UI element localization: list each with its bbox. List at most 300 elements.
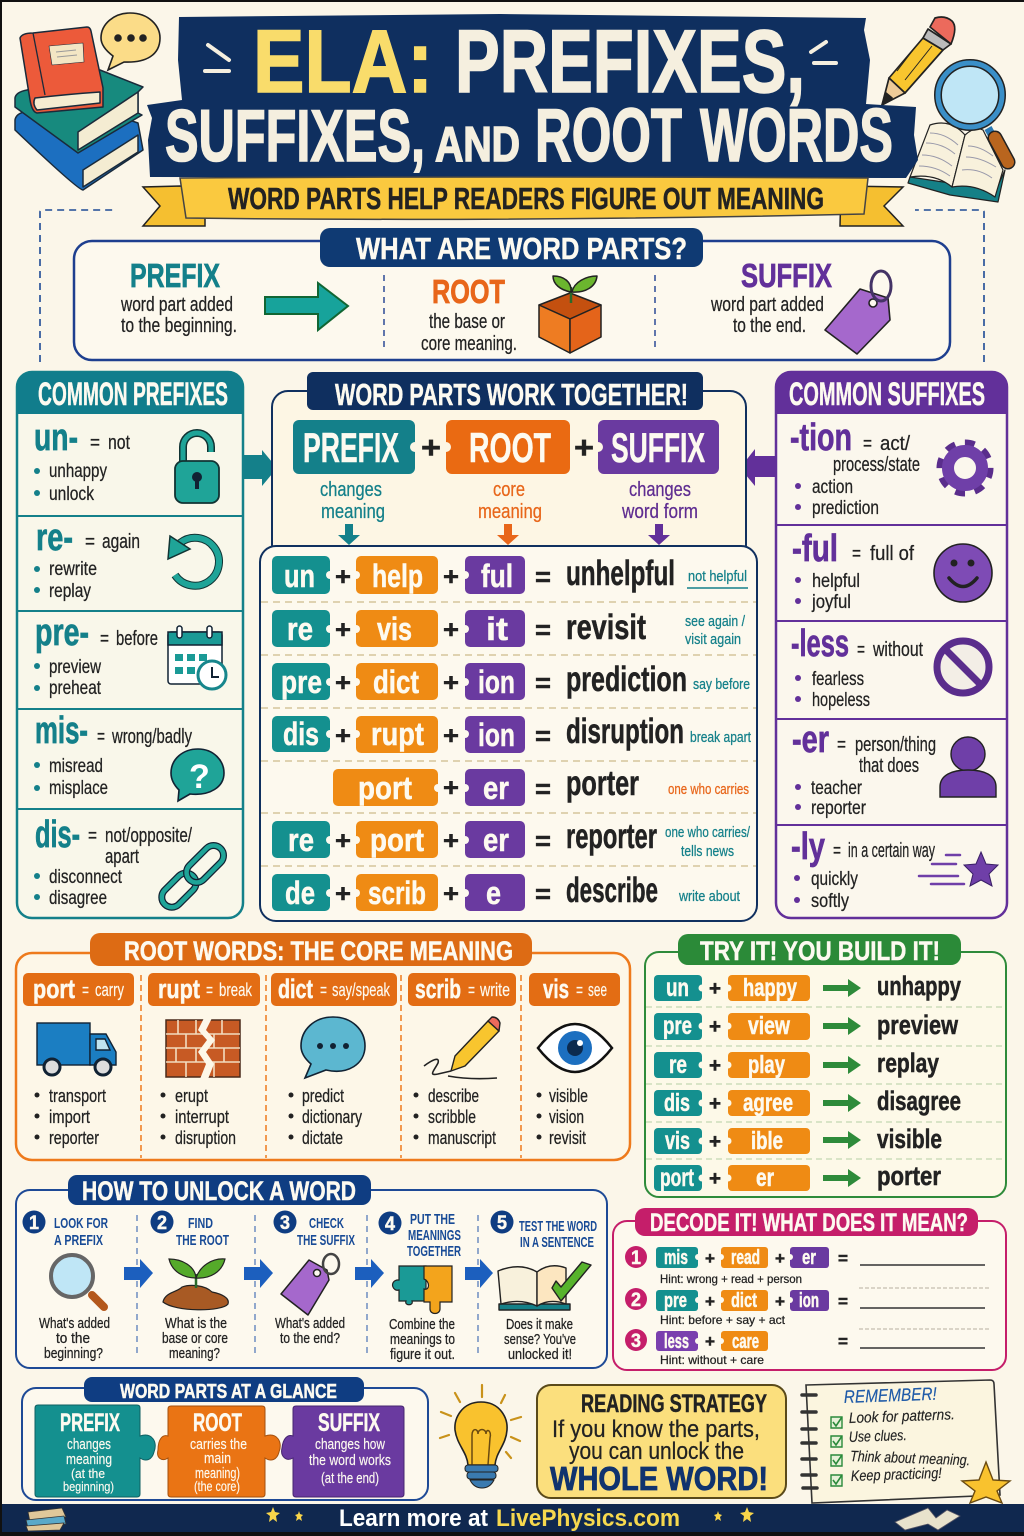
step 2: base or core [162,1331,228,1347]
callout: reading strategy [537,1385,786,1498]
heading: what are word parts: WHAT ARE WORD PARTS? [356,231,687,266]
icon: calendar with clock [168,626,226,689]
icon: tag [281,1254,339,1315]
suffix definition: to the end. [733,315,806,337]
decode row 1: + [775,1249,785,1268]
icon: gold star [962,1462,1010,1503]
suffix: er: that does [859,755,919,777]
notepad: remember: Look for patterns. [849,1406,955,1427]
equation: unhelpful: = [535,562,551,592]
heading: root words: ROOT WORDS: THE CORE MEANING [124,936,513,966]
step 1 [22,1210,110,1362]
equation: revisit: visit again [685,631,741,648]
build row: replay: replay [877,1048,939,1078]
formula: prefix: PREFIX [303,424,399,471]
arrow: suffixes to center [740,449,775,486]
step 1: beginning? [44,1346,103,1362]
decode row 3: + [705,1332,715,1351]
panel: common prefixes [17,372,243,918]
step 4: MEANINGS [408,1227,461,1244]
footer text [339,1505,680,1532]
equation: porter [333,764,749,806]
equation: reporter: = [535,826,551,856]
step 2 [150,1210,229,1362]
suffix: ly: = [833,840,841,862]
suffix: ly: in a certain way [848,840,935,862]
icon: pencil writing [424,1017,500,1079]
root card: vis: vis [543,974,569,1004]
build row: visible: + [709,1131,721,1153]
build row: porter: er [756,1164,774,1192]
suffix: ful: helpful [812,571,860,592]
panel: word parts at a glance [22,1377,428,1500]
prefix: un: not [108,432,130,454]
suffix: ful: -ful [792,528,838,570]
heading: word parts work together: WORD PARTS WORK TOGETHER! [335,377,688,412]
equation: prediction: + [443,669,459,697]
suffix: tion [790,417,920,519]
decode row 1: = [838,1249,848,1268]
root card: port: import [49,1107,90,1127]
arrow [465,1259,493,1288]
root card: scrib: manuscript [428,1128,496,1148]
root card: dict [271,973,397,1148]
equation: unhelpful: ful [481,558,513,594]
build row: preview: preview [877,1010,959,1040]
equation: disruption: + [335,722,351,750]
caption: changes word form: changes [629,479,691,501]
equation: reporter: + [443,827,459,855]
decode row 1: read [731,1247,760,1269]
root definition: core meaning. [421,333,517,355]
title banner [147,11,918,178]
step 5: unlocked it! [508,1347,572,1363]
equation: unhelpful: not helpful [688,568,747,585]
panel: try it you build it [645,934,1006,1197]
prefix: dis: not/opposite/ [105,825,192,847]
decode row 1 [625,1246,985,1286]
prefix: dis: dis- [35,814,80,856]
build row: unhappy: unhappy [877,971,961,1001]
step 3: CHECK [309,1215,344,1232]
build row: replay: play [748,1051,785,1079]
caption: changes word form: word form [621,501,698,523]
root card: scrib: = [468,980,475,1000]
prefix: pre: = [100,628,109,650]
root card: rupt: rupt [158,974,200,1004]
notepad: remember: Think about meaning. [850,1448,970,1469]
footer stars [266,1507,754,1522]
icon: chain links [158,841,228,911]
footer text: LivePhysics.com [496,1505,680,1532]
root card: vis: = [576,980,583,1000]
equation: describe: scrib [368,875,426,911]
puzzle piece: prefix: (at the [71,1466,105,1481]
equation: prediction [272,660,750,700]
suffix: ly: quickly [811,869,858,890]
decode row 2: + [705,1292,715,1311]
panel: what are word parts [74,228,950,360]
arrow [124,1259,153,1288]
prefix: re [34,517,140,602]
step 4: 4 [385,1214,395,1235]
build row: porter: porter [877,1161,941,1191]
build row: porter: + [709,1168,721,1190]
suffix: er: reporter [811,798,867,819]
puzzle piece: root: (the core) [194,1478,240,1494]
root card: scrib [408,973,516,1148]
build row: replay: re [669,1051,687,1079]
footer bar [0,1504,1024,1536]
icon: open padlock [175,433,219,503]
decode row 2: dict [731,1290,757,1312]
build row: unhappy: happy [743,974,797,1002]
root card: rupt: disruption [175,1128,236,1148]
decode row 3 [625,1329,985,1367]
equation: unhelpful: help [372,558,423,594]
decode row 3: = [838,1332,848,1351]
step 4: figure it out. [390,1347,455,1363]
equation: describe: describe [566,871,658,910]
decode row 1: + [705,1249,715,1268]
prefix: un: un- [34,417,78,459]
step 3: What's added [275,1316,345,1332]
icon: purple tag [825,271,891,354]
build row: visible [654,1124,942,1155]
step 3: to the end? [280,1331,340,1347]
panel: common suffixes [776,372,1007,918]
suffix: less: fearless [812,669,864,690]
equation: unhelpful: un [284,558,315,594]
suffix: ly: -ly [791,826,825,868]
caption: core meaning: meaning [478,501,542,523]
formula: prefix [293,420,420,474]
root card: scrib: write [479,980,510,1000]
puzzle piece: root: main [204,1450,231,1467]
equation: porter: porter [566,764,639,803]
equation: prediction: + [335,669,351,697]
arrow [244,1259,273,1288]
build row: preview: view [748,1012,790,1040]
icon: eye [538,1024,612,1072]
prefix: dis [34,814,192,909]
suffix: tion: action [812,477,853,498]
equation: reporter: re [288,822,314,858]
equation: porter: er [483,770,509,806]
prefix: mis: misplace [49,778,108,799]
puzzle piece: root: carries the [190,1436,247,1453]
callout: reading strategy: READING STRATEGY [581,1390,767,1418]
step 4 [378,1211,461,1363]
equation: prediction: ion [478,664,515,700]
suffix: less: without [872,639,923,661]
suffix: er: person/thing [855,734,936,756]
root card: dict: predict [302,1086,344,1106]
prefix: mis: wrong/badly [111,726,192,748]
icon: person [940,737,996,797]
puzzle piece: suffix: the word works [309,1452,391,1469]
decode row 2: ion [799,1290,819,1312]
puzzle piece: prefix: beginning) [63,1479,114,1494]
step 5: 5 [497,1213,507,1234]
equation: porter: port [358,770,412,806]
title line 1: ELA: [253,11,433,111]
equation: prediction: say before [693,676,750,693]
step 3 [274,1210,355,1347]
prefix: dis: disconnect [49,867,123,888]
prefix: un [34,417,130,505]
suffix definition: SUFFIX [741,257,832,294]
step 5: sense? You've [504,1332,576,1348]
decode row 3: care [732,1331,759,1353]
footer text: Learn more at [339,1505,488,1532]
formula: root: ROOT [469,424,551,471]
title line 2: WORDS [700,93,893,177]
equation: disruption: break apart [690,729,752,746]
prefix: re: rewrite [49,559,97,580]
icon: speech bubble [301,1017,365,1078]
step 2: FIND [188,1215,213,1232]
decode row 1: er [802,1247,816,1269]
suffix definition [710,257,832,337]
step 2: 2 [157,1213,167,1234]
decode row 2: = [838,1292,848,1311]
decode row 2 [625,1288,985,1327]
equation: prediction: = [535,668,551,698]
root card: scrib: scribble [428,1107,476,1127]
build row: porter: port [660,1164,694,1192]
root card: rupt [148,973,260,1148]
icon: stack of books [15,27,143,190]
title line 2: AND [435,118,520,172]
equation: describe: + [335,880,351,908]
prefix definition: to the beginning. [121,315,237,337]
equation: revisit: it [486,611,508,647]
equation: prediction: prediction [566,660,687,699]
suffix: tion: prediction [812,498,879,519]
formula: suffix [593,420,719,474]
build row: visible: visible [877,1124,942,1154]
icon: cracked brick wall [166,1018,240,1079]
puzzle piece: prefix: changes [67,1436,111,1453]
root card: scrib: describe [428,1086,479,1106]
title line 1: PREFIXES, [455,11,805,111]
prefix: mis [34,710,192,799]
puzzle piece: root [158,1406,280,1497]
formula: root [441,420,570,474]
root definition: ROOT [432,273,505,310]
root card: rupt: erupt [175,1086,208,1106]
heading: word parts at a glance [84,1377,364,1403]
panel: word parts work together formula: + [574,430,594,465]
suffix: ly [791,826,935,912]
prefix: pre: before [116,628,158,650]
equation: reporter: er [483,822,509,858]
root card: port: reporter [49,1128,99,1148]
equation: describe: e [486,875,501,911]
build row: disagree: + [709,1093,721,1115]
prefix: re: again [102,531,140,553]
prefix: re: re- [36,517,73,559]
root card: port [23,973,134,1148]
icon: books [26,1508,66,1531]
root card: rupt: break [219,980,253,1000]
puzzle piece: prefix [35,1405,155,1497]
prefix: pre: preheat [49,678,102,699]
suffix: er: = [837,734,846,756]
equation: revisit: see again / [685,613,746,630]
icon: question speech bubble: ? [189,758,210,796]
equation: reporter: tells news [681,843,734,860]
equation: describe: = [535,879,551,909]
suffix: less: hopeless [812,690,870,711]
root card: vis [529,973,620,1148]
step 2: THE ROOT [176,1232,229,1249]
build row: preview: + [709,1016,721,1038]
equation: reporter: reporter [566,817,657,856]
step 4: Combine the [389,1317,455,1333]
root card: scrib: scrib [415,974,461,1004]
decode row 3: 3 [631,1331,641,1352]
decode row 1: 1 [631,1248,641,1269]
root card: dict: dict [278,974,313,1004]
icon: teal arrow [265,283,348,330]
equation: revisit: vis [377,611,412,647]
equation: prediction: pre [281,664,322,700]
step 2: meaning? [169,1346,220,1362]
build row: disagree: disagree [877,1086,961,1116]
build row: disagree: agree [743,1089,793,1117]
decode row 2: 2 [631,1290,641,1311]
caption: changes meaning [320,479,385,545]
equation: prediction: dict [373,664,419,700]
prefix: pre: preview [49,657,101,678]
step 1: A PREFIX [54,1232,103,1249]
root card: vis: vision [549,1107,584,1127]
prefix: dis: = [88,825,97,847]
notepad: remember [802,1380,1010,1503]
title line 1 [253,11,805,111]
build row: preview: pre [663,1012,692,1040]
panel: decode it [613,1208,1006,1370]
prefix: un: unhappy [49,461,107,482]
step 2: What is the [165,1316,227,1332]
step 5 [490,1210,597,1363]
arrow: prefixes to center [243,450,277,486]
icon: seedling in soil [163,1259,228,1310]
step 1: 1 [29,1213,39,1234]
icon: gear [941,444,989,492]
suffix: ly: softly [811,891,849,912]
build row: unhappy: + [709,978,721,1000]
icon: undo arrow [168,536,219,586]
root definition: the base or [429,311,505,333]
icon: truck [37,1023,116,1075]
icon: pencil [882,17,955,105]
root card: port: = [82,980,89,1000]
caption: core meaning: core [493,479,525,501]
suffix: tion: act/ [880,433,910,455]
root definition [421,273,517,355]
caption: changes word form [621,479,698,545]
root card: dict: dictate [302,1128,343,1148]
equation: unhelpful [272,554,748,594]
prefix: mis: misread [49,756,103,777]
suffix: less: -less [791,623,849,665]
notepad: remember: Keep practicing! [851,1465,943,1485]
icon: puzzle pieces [393,1266,452,1314]
build row: porter [654,1161,941,1192]
puzzle piece: suffix: (at the end) [321,1470,379,1487]
root card: vis: visible [549,1086,588,1106]
suffix: tion: process/state [833,454,920,476]
suffix: er: teacher [811,778,863,799]
prefix definition [120,257,237,337]
callout: reading strategy: you can unlock the [569,1438,744,1465]
suffix: ful: = [852,543,861,565]
step 4: PUT THE [410,1211,455,1228]
ribbon subtitle: WORD PARTS HELP READERS FIGURE OUT MEANING [228,181,824,216]
decode row 2: + [775,1292,785,1311]
build row: visible: ible [751,1127,783,1155]
suffix: ful [792,528,914,613]
decode row 1: Hint: wrong + read + person [660,1272,802,1286]
prefix: re: replay [49,581,91,602]
prefix: pre: pre- [35,612,89,654]
panel: root words [16,933,630,1160]
puzzle piece: prefix: PREFIX [60,1409,120,1437]
equation: revisit: = [535,615,551,645]
step 1: LOOK FOR [54,1215,108,1232]
icon: light bulb [440,1385,521,1488]
prefix: dis: apart [105,846,139,868]
panel: word parts work together formula: + [421,430,441,465]
root card: vis: see [588,980,607,1000]
equation: revisit: + [335,616,351,644]
title line 2: ROOT [535,93,682,177]
heading: word parts at a glance: WORD PARTS AT A GLANCE [120,1381,337,1403]
heading: try it: TRY IT! YOU BUILD IT! [700,936,940,966]
build row: disagree [654,1086,961,1117]
arrow [355,1259,384,1288]
step 5: TEST THE WORD [519,1218,597,1235]
icon: smiley face [934,544,992,602]
root card: port: transport [49,1086,106,1106]
puzzle piece: suffix: SUFFIX [318,1409,380,1437]
equation: reporter [272,817,751,860]
equation: describe: + [443,880,459,908]
decode row 2: Hint: before + say + act [660,1313,786,1327]
prefix definition: PREFIX [130,257,220,294]
prefix: mis: mis- [35,710,88,752]
root card: rupt: interrupt [175,1107,229,1127]
equation: describe [272,871,741,911]
equation: reporter: port [370,822,424,858]
heading: common prefixes [17,372,243,414]
formula: suffix: SUFFIX [611,424,705,471]
prefix: re: = [85,531,95,553]
decode row 1: mis [664,1247,688,1269]
notepad: remember: REMEMBER! [843,1384,937,1407]
puzzle piece: root: meaning) [195,1465,240,1482]
notepad: remember: Use clues. [849,1427,907,1446]
icon: open book with check mark [498,1262,591,1310]
suffix: less [791,623,923,711]
prefix: un: = [90,432,100,454]
heading: word parts work together [307,372,703,412]
step 3: THE SUFFIX [297,1232,355,1249]
build row: replay [654,1048,939,1079]
